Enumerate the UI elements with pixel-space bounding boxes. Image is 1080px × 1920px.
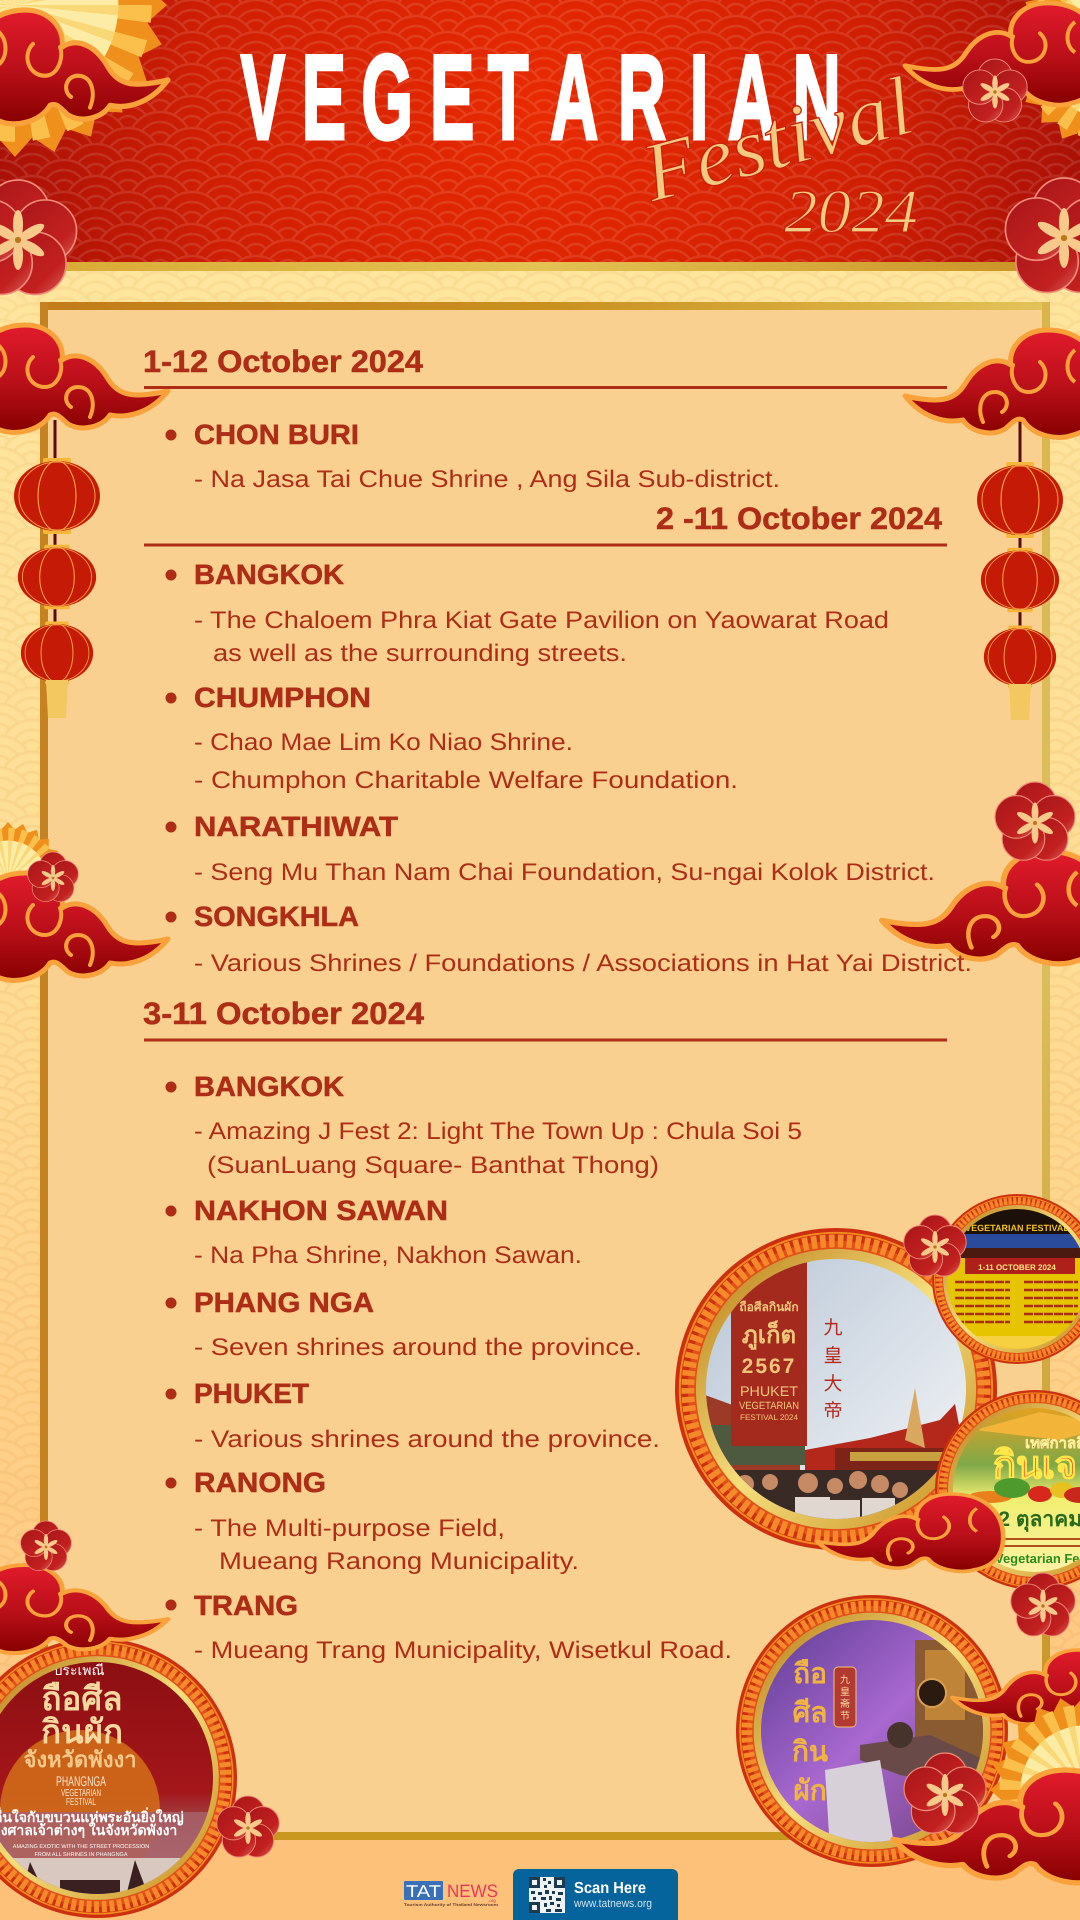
section: 3-11 October 2024: 3-11 October 2024 xyxy=(143,996,425,1031)
item: Bangkok: - The Chaloem Phra Kiat Gate Pavilion on Yaowarat Road xyxy=(194,607,889,634)
subtitle script: 2024 xyxy=(784,178,918,246)
item: Trang: TRANG xyxy=(194,1590,298,1621)
item: Bangkok xyxy=(166,559,889,667)
icon: flower xyxy=(904,1215,966,1276)
item: Chumphon xyxy=(166,682,738,794)
decoration: header corner flowers xyxy=(0,178,1080,294)
item: Trang: - Mueang Trang Municipality, Wisetkul Road. xyxy=(194,1637,732,1664)
icon: flower small xyxy=(21,1521,71,1571)
item: Bangkok: BANGKOK xyxy=(194,559,344,590)
medallion: Phuket Vegetarian Festival photo xyxy=(675,1228,997,1550)
logo: TAT News: NEWS xyxy=(447,1881,498,1901)
item: Ranong: RANONG xyxy=(194,1467,326,1498)
item: Chon Buri: CHON BURI xyxy=(194,419,359,450)
section: 2-11 October 2024: 2 -11 October 2024 xyxy=(656,501,943,536)
poster banner: VEGETARIAN xyxy=(739,1400,799,1412)
thai vertical title: ผัก xyxy=(793,1775,827,1806)
item: Bangkok: BANGKOK xyxy=(194,1071,344,1102)
item: Nakhon Sawan xyxy=(166,1195,582,1269)
scan here badge: Scan Here xyxy=(574,1880,646,1897)
medallion: Phang Nga poster: ประเพณี xyxy=(54,1662,104,1678)
item: Chumphon: CHUMPHON xyxy=(194,682,371,713)
scan here badge: www.tatnews.org xyxy=(573,1898,652,1910)
item: Bangkok xyxy=(166,1071,802,1179)
icon: cloud xyxy=(0,1565,168,1653)
logo: TAT News: TAT xyxy=(406,1882,441,1901)
medallion: Khin Je festival poster xyxy=(817,1390,1080,1636)
subtitle script: Festival xyxy=(632,59,923,221)
icon: flower large xyxy=(217,1796,279,1857)
medallion: Phang Nga poster: จังหวัดพังงา xyxy=(23,1747,137,1772)
item: Chumphon: - Chao Mae Lim Ko Niao Shrine. xyxy=(194,729,573,756)
item: Phuket: PHUKET xyxy=(194,1378,309,1409)
icon: QR code xyxy=(529,1877,565,1913)
vertical chinese title: 皇 xyxy=(823,1346,843,1367)
medallion: Phang Nga poster: PHANGNGA xyxy=(56,1773,106,1789)
logo: TAT News xyxy=(404,1881,499,1907)
thai vertical title xyxy=(792,1658,828,1806)
thai vertical title: ถือ xyxy=(793,1658,827,1689)
medallion: yellow schedule poster: 1-11 OCTOBER 2024 xyxy=(978,1263,1056,1272)
medallion: Phang Nga poster: FESTIVAL xyxy=(66,1797,96,1808)
item: Phuket xyxy=(166,1378,660,1453)
medallion: yellow schedule poster: VEGETARIAN FESTIVAL xyxy=(965,1223,1069,1233)
section: 1-12 October 2024 xyxy=(143,344,947,493)
plaque: 节 xyxy=(840,1710,850,1722)
vertical chinese title: 大 xyxy=(823,1374,843,1395)
icon: flower xyxy=(904,1753,986,1833)
decoration: top left fan and cloud xyxy=(0,0,168,157)
medallion: Phang Nga poster: FROM ALL SHRINES IN PHANGNGA xyxy=(34,1852,128,1858)
item: Phang Nga xyxy=(166,1287,642,1361)
item: Phuket: - Various shrines around the province. xyxy=(194,1426,660,1453)
item: Nakhon Sawan: - Na Pha Shrine, Nakhon Sawan. xyxy=(194,1242,582,1269)
poster banner: 2567 xyxy=(742,1355,796,1378)
vertical chinese title: 九 xyxy=(823,1318,843,1339)
decoration: right lanterns with cloud xyxy=(905,330,1080,720)
item: Bangkok: as well as the surrounding streets. xyxy=(213,640,627,667)
icon: fan xyxy=(990,1695,1080,1885)
medallion: yellow schedule poster xyxy=(904,1194,1080,1364)
decoration: left lanterns with cloud xyxy=(0,325,168,718)
item: Ranong: - The Multi-purpose Field, xyxy=(194,1515,505,1542)
plaque xyxy=(834,1667,856,1727)
item: Ranong: Mueang Ranong Municipality. xyxy=(219,1548,579,1575)
title: VEGETARIAN xyxy=(241,30,841,164)
item: Trang xyxy=(166,1590,732,1664)
vertical chinese title: 帝 xyxy=(823,1400,843,1422)
plaque: 斋 xyxy=(840,1698,850,1710)
scan here badge xyxy=(513,1869,678,1920)
panel: content frame xyxy=(40,302,1050,1840)
medallion: Phang Nga poster xyxy=(0,1521,279,1918)
item: Chon Buri: - Na Jasa Tai Chue Shrine , Ang Sila Sub-district. xyxy=(194,466,780,493)
medallion: Trang clock tower photo xyxy=(736,1595,1080,1885)
plaque: 皇 xyxy=(840,1686,850,1698)
item: Phang Nga: - Seven shrines around the province. xyxy=(194,1334,642,1361)
decoration: mid left fan, cloud and flower xyxy=(0,822,168,980)
thai vertical title: กิน xyxy=(792,1736,828,1767)
icon: flower xyxy=(1011,1573,1075,1636)
vertical chinese title xyxy=(823,1318,843,1422)
plaque: 九 xyxy=(840,1674,850,1686)
title xyxy=(241,30,923,246)
logo: TAT News: Tourism Authority of Thailand Newsroom xyxy=(404,1902,499,1907)
section: 3-11 October 2024 xyxy=(143,996,947,1664)
item: Ranong xyxy=(166,1467,579,1575)
medallion: Phang Nga poster: AMAZING EXOTIC WITH THE STREET PROCESSION xyxy=(13,1844,149,1850)
decoration: mid right cloud and flower xyxy=(882,782,1080,964)
thai vertical title: ศีล xyxy=(793,1697,827,1728)
section: 2-11 October 2024 xyxy=(144,501,972,977)
header band xyxy=(0,0,1080,271)
item: Songkhla: SONGKHLA xyxy=(194,901,359,932)
icon: cloud xyxy=(817,1494,1003,1571)
poster banner: ภูเก็ต xyxy=(742,1320,796,1350)
medallion: Phang Nga poster: ถือศีล xyxy=(42,1680,122,1717)
icon: cloud xyxy=(893,1770,1080,1883)
item: Phang Nga: PHANG NGA xyxy=(194,1287,374,1318)
poster banner: PHUKET xyxy=(740,1383,798,1399)
medallion: Khin Je festival poster: กินเจ xyxy=(993,1445,1077,1487)
icon: upper cloud xyxy=(952,1650,1080,1727)
medallion: Phang Nga poster: กินผัก xyxy=(41,1713,123,1750)
item: Songkhla xyxy=(166,901,972,977)
item: Nakhon Sawan: NAKHON SAWAN xyxy=(194,1195,448,1226)
item: Bangkok: - Amazing J Fest 2: Light The Town Up : Chula Soi 5 xyxy=(194,1118,802,1145)
item: Songkhla: - Various Shrines / Foundations / Associations in Hat Yai District. xyxy=(194,950,972,977)
item: Bangkok: (SuanLuang Square- Banthat Thong) xyxy=(207,1152,659,1179)
item: Chumphon: - Chumphon Charitable Welfare Foundation. xyxy=(194,767,738,794)
item: Narathiwat: NARATHIWAT xyxy=(194,811,398,842)
poster banner: FESTIVAL 2024 xyxy=(740,1413,799,1422)
medallion: Phang Nga poster: VEGETARIAN xyxy=(61,1788,101,1799)
item: Narathiwat xyxy=(166,811,935,886)
section: 1-12 October 2024: 1-12 October 2024 xyxy=(143,344,424,379)
poster banner: ถือศีลกินผัก xyxy=(739,1300,799,1314)
decoration: top right fan, cloud and flower xyxy=(905,0,1080,152)
item: Chon Buri xyxy=(166,419,780,493)
poster banner xyxy=(731,1262,807,1446)
logo: TAT News: .org xyxy=(488,1898,496,1903)
item: Narathiwat: - Seng Mu Than Nam Chai Foundation, Su-ngai Kolok District. xyxy=(194,859,935,886)
